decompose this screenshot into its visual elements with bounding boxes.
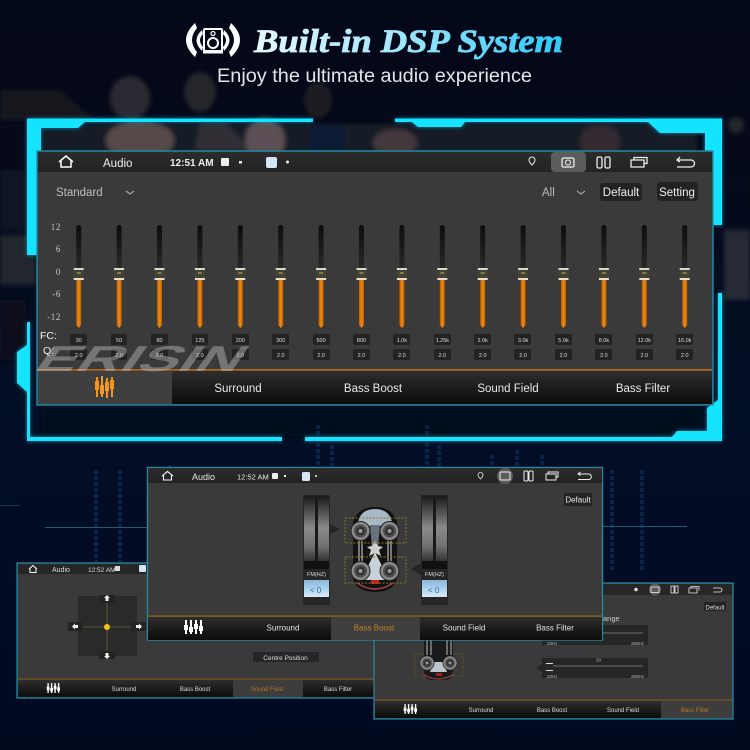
header bar: 12:51 AM — [170, 158, 214, 169]
right bass level column — [421, 495, 448, 605]
FC and Q labels — [40, 330, 57, 357]
frequency values: 125 — [195, 338, 204, 344]
frequency value chips — [70, 334, 693, 360]
car speakers partial — [415, 640, 463, 680]
tab bar: Surround — [112, 687, 136, 693]
frequency values: 2.0 — [519, 353, 527, 359]
gain scale: -6 — [52, 289, 61, 299]
left bass level column: FM(HZ) — [307, 572, 326, 578]
frequency values: 2.0 — [358, 353, 365, 359]
FC and Q labels: FC: — [40, 330, 57, 342]
centre position button — [253, 652, 319, 662]
gain scale — [47, 222, 61, 322]
frequency values: 300 — [276, 338, 285, 344]
title: Built-in DSP System — [253, 24, 563, 60]
panel: sound field screen — [17, 563, 377, 698]
default button: Default — [565, 496, 591, 504]
gain scale: 12 — [51, 222, 61, 232]
filter sliders: 250Hz — [631, 674, 645, 679]
filter sliders: 20Hz — [547, 641, 558, 646]
frequency values: 2.0 — [560, 353, 567, 359]
frequency values: 2.0 — [600, 353, 608, 359]
channel selector and buttons — [542, 182, 698, 201]
header bar: 12:52 AM — [88, 567, 115, 574]
filter sliders: 250Hz — [631, 641, 645, 646]
default button — [704, 602, 726, 612]
right bass level column: FM(HZ) — [425, 572, 444, 578]
pointers — [330, 524, 421, 575]
tab bar: Bass Filter — [324, 687, 352, 693]
channel selector and buttons: Default — [603, 187, 640, 199]
gain scale: -12 — [47, 312, 61, 322]
tab bar: Bass Boost — [537, 708, 568, 714]
frequency values: 2.0 — [236, 353, 244, 359]
header bar — [375, 584, 732, 596]
default button: Default — [705, 606, 725, 612]
frequency values: 8.0k — [599, 338, 609, 344]
frequency values: 30 — [76, 338, 82, 344]
subtitle: Enjoy the ultimate audio experience — [217, 66, 532, 87]
tab bar: Bass Filter — [536, 624, 574, 632]
gain scale: 6 — [56, 244, 61, 254]
frequency values: 1.25k — [436, 338, 449, 344]
default button — [564, 493, 592, 506]
gain scale: 0 — [56, 267, 61, 277]
frequency values: 80 — [156, 338, 163, 344]
header bar: 12:52 AM — [237, 472, 269, 482]
header bar — [18, 564, 376, 574]
preset dropdown — [56, 187, 134, 199]
watermark: Erisin: ERISIN — [26, 339, 259, 379]
range label: ange — [603, 614, 620, 623]
car top view with speakers — [345, 507, 406, 592]
left bass level column — [303, 495, 330, 605]
panel: bass boost screen — [148, 468, 602, 640]
tab bar: Surround — [214, 383, 262, 395]
left bass level column: < 0 — [310, 586, 322, 595]
channel selector and buttons: All — [542, 187, 555, 199]
frequency values: 1.0k — [397, 338, 407, 344]
frequency values: 2.0 — [75, 353, 83, 359]
tab bar: Bass Filter — [681, 708, 709, 714]
tab bar: Bass Boost — [354, 624, 395, 632]
tab bar: Surround — [469, 708, 493, 714]
icon: speaker with sound waves — [186, 23, 240, 57]
balance pad — [68, 595, 146, 659]
equalizer sliders — [74, 225, 690, 328]
tab bar: Bass Boost — [180, 687, 211, 693]
header bar — [148, 468, 602, 484]
tab bar: Sound Field — [477, 383, 539, 395]
tab bar — [375, 700, 732, 718]
frequency values: 800 — [357, 338, 366, 344]
frequency values: 2.0 — [196, 353, 204, 359]
filter sliders: 20 — [596, 658, 602, 662]
frequency values: 50 — [116, 338, 122, 344]
centre position button: Centre Position — [263, 655, 308, 662]
frequency values: 2.0 — [479, 353, 487, 359]
tab bar: Sound Field — [607, 708, 639, 714]
header bar: Audio — [192, 472, 215, 482]
frequency values: 2.0 — [681, 353, 689, 359]
frequency values: 2.0 — [115, 353, 123, 359]
right bass level column: < 0 — [428, 586, 440, 595]
FC and Q labels: Q: — [43, 345, 54, 357]
tab bar: Surround — [267, 624, 299, 632]
frequency values: 500 — [317, 338, 326, 344]
tab bar — [18, 678, 376, 697]
frequency values: 5.0k — [558, 338, 569, 344]
frequency values: 3.0k — [518, 338, 529, 344]
frequency values: 2.0 — [317, 353, 325, 359]
frequency values: 200 — [236, 338, 245, 344]
tab bar — [148, 616, 602, 640]
frequency values: 16.0k — [678, 338, 692, 344]
tab bar: Bass Filter — [616, 383, 670, 395]
frequency values: 2.0 — [277, 353, 285, 359]
frequency values: 2.0 — [438, 353, 446, 359]
tab bar: Bass Boost — [344, 383, 403, 395]
tab bar — [38, 369, 712, 404]
frequency values: 12.0k — [638, 338, 651, 344]
frequency values — [75, 338, 692, 359]
channel selector and buttons: Setting — [659, 187, 695, 199]
header bar: Audio — [103, 158, 132, 170]
frequency values: 2.0 — [398, 353, 406, 359]
panel: main equalizer screen — [37, 151, 713, 405]
frequency values: 2.0k — [477, 338, 488, 344]
header bar — [38, 152, 712, 172]
frequency values: 2.0 — [640, 353, 648, 359]
header bar: Audio — [52, 567, 70, 574]
tab bar: Sound Field — [443, 624, 485, 632]
neon frame — [17, 118, 722, 441]
panel: bass filter screen — [374, 583, 733, 719]
filter sliders — [536, 625, 648, 679]
frequency values: 2.0 — [156, 353, 163, 359]
preset dropdown: Standard — [56, 187, 103, 199]
tab bar: Sound Field — [251, 687, 283, 693]
filter sliders: 20Hz — [547, 674, 558, 679]
